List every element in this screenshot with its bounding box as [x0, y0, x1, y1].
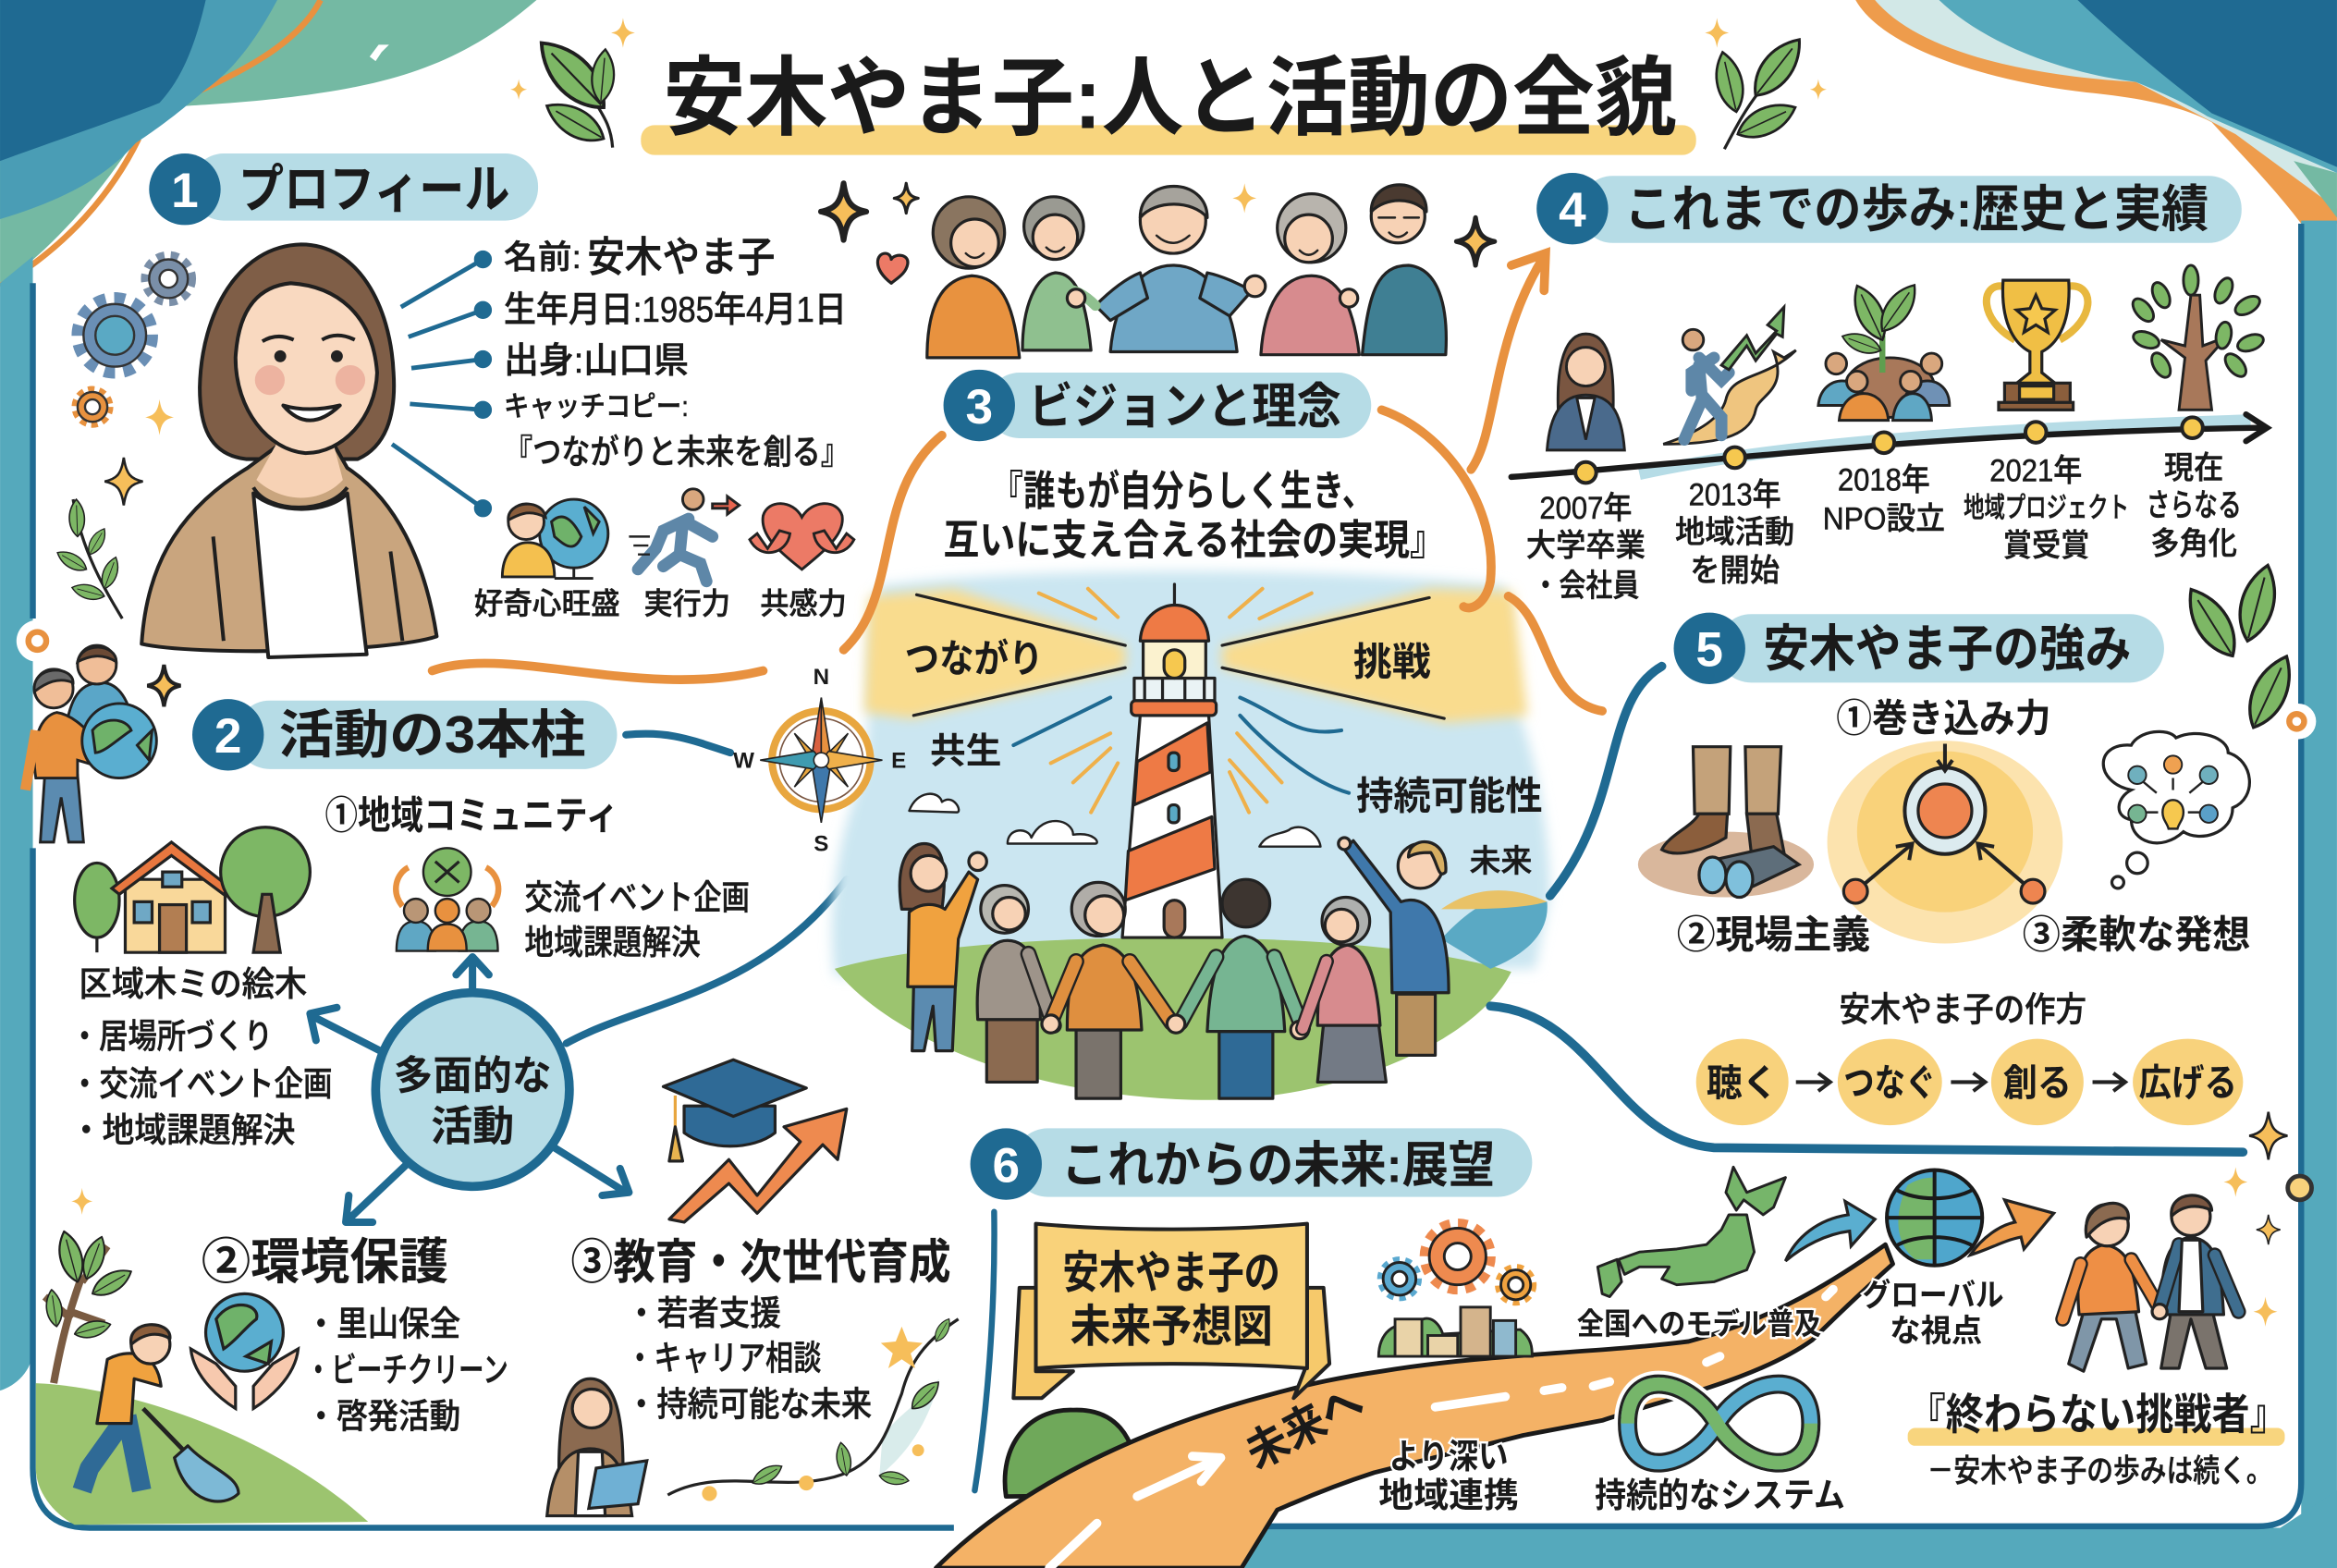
panel: activities	[25, 645, 959, 1516]
timeline labels: 2007年	[1539, 491, 1632, 526]
hub: multifaceted activities: 多面的な	[394, 1054, 552, 1098]
list: place making	[70, 1016, 333, 1149]
process: listen connect create expand	[1696, 1039, 2243, 1125]
icon: earth in hands	[190, 1293, 298, 1408]
portrait	[141, 244, 436, 657]
heading: future: 6	[992, 1138, 1020, 1193]
caption: house: 区域木ミの絵木	[80, 964, 307, 1003]
hub arrows	[310, 734, 847, 1222]
icon: globe	[1887, 1170, 1982, 1266]
icon: community	[396, 848, 498, 951]
vision statement: 『誰もが自分らしく生き、	[991, 468, 1374, 515]
title: 安木やま子:人と活動の全貌	[663, 50, 1677, 147]
sub-heading: environment: ②環境保護	[202, 1235, 448, 1290]
sub-heading: education: ③教育・次世代育成	[571, 1235, 951, 1289]
timeline labels: さらなる	[2147, 488, 2242, 523]
timeline labels	[1526, 451, 2242, 604]
list: place making: ・交流イベント企画	[70, 1064, 333, 1103]
panel: profile	[54, 153, 854, 657]
divider line	[974, 1212, 995, 1490]
illustration: environment cleanup	[44, 1188, 239, 1501]
banner: future forecast	[1013, 1224, 1329, 1398]
icon: title leaves left	[510, 18, 635, 150]
heading: future: これからの未来:展望	[1061, 1138, 1495, 1193]
beam keywords	[905, 637, 1543, 879]
icon: gears and city	[1378, 1225, 1532, 1356]
timeline labels: ・会社員	[1532, 569, 1639, 604]
icon: curious child with globe	[502, 499, 608, 579]
list: education: ・キャリア相談	[626, 1339, 821, 1378]
icon: orange arrow	[1970, 1200, 2054, 1255]
panel: vision	[433, 253, 2243, 1152]
list: place making: ・地域課題解決	[70, 1110, 295, 1149]
future labels: な視点	[1890, 1314, 1982, 1349]
sub-heading: community: ①地域コミュニティ	[325, 793, 618, 837]
hub: multifaceted activities: 活動	[431, 1102, 514, 1149]
timeline labels: 地域活動	[1675, 515, 1794, 550]
background: top-left curtain	[0, 0, 536, 287]
future labels: より深い	[1389, 1437, 1509, 1476]
closing message: 『終わらない挑戦者』	[1908, 1390, 2288, 1439]
heading: vision: ビジョンと理念	[1028, 380, 1341, 435]
icon: climber	[1663, 307, 1796, 444]
panel: future	[936, 1128, 2288, 1568]
profile facts: 名前:	[504, 239, 581, 276]
list: environment	[306, 1305, 508, 1435]
heading: profile: プロフィール	[239, 160, 509, 218]
timeline labels: 現在	[2164, 451, 2223, 486]
timeline labels: 大学卒業	[1526, 528, 1646, 563]
beam keywords: つながり	[905, 637, 1044, 680]
method heading: 安木やま子の作方	[1839, 989, 2086, 1028]
icon: infinity	[1628, 1384, 1811, 1463]
list: environment: ・ビーチクリーン	[306, 1350, 508, 1389]
icon: compass: N	[814, 665, 829, 690]
timeline labels: NPO設立	[1823, 501, 1945, 536]
illustration: couple walking	[2062, 1195, 2239, 1371]
future labels: 全国へのモデル普及	[1577, 1307, 1821, 1341]
list: environment: ・里山保全	[306, 1305, 460, 1343]
list: community	[525, 877, 750, 962]
future labels: 持続的なシステム	[1595, 1476, 1845, 1514]
profile facts: 生年月日:1985年4月1日	[504, 290, 847, 330]
icon: gears	[76, 256, 190, 506]
profile facts: キャッチコピー:	[504, 391, 689, 423]
icon: graduation cap and rising arrow	[663, 1060, 847, 1222]
timeline labels: を開始	[1690, 554, 1780, 589]
process: listen connect create expand: 創る	[2003, 1062, 2072, 1104]
trait labels: 好奇心旺盛	[474, 587, 620, 620]
beam keywords: 挑戦	[1353, 640, 1431, 683]
icon: sparkle	[2249, 1112, 2287, 1159]
list: education: ・持続可能な未来	[626, 1385, 872, 1424]
timeline labels: 地域プロジェクト	[1964, 492, 2129, 523]
strengths labels: ③柔軟な発想	[2023, 913, 2250, 956]
timeline labels: 2018年	[1838, 462, 1930, 497]
icon: seedling with people	[1818, 278, 1950, 421]
icon: compass: S	[814, 832, 828, 857]
icon: compass	[733, 665, 906, 857]
beam keywords: 持続可能性	[1356, 774, 1543, 817]
list: environment: ・啓発活動	[306, 1396, 460, 1435]
timeline labels: 賞受賞	[2003, 528, 2089, 563]
process: listen connect create expand: 広げる	[2139, 1062, 2237, 1104]
icon: leaf sprig	[54, 499, 122, 619]
icon: student with tablet	[547, 1378, 647, 1516]
timeline	[1511, 414, 2267, 483]
icon: vine with star	[667, 1317, 959, 1501]
icon: compass: E	[891, 748, 906, 773]
icon: compass: W	[733, 748, 754, 773]
people holding hands	[899, 838, 1449, 1098]
future labels: グローバル	[1862, 1278, 2004, 1313]
icon: boots and binoculars	[1638, 747, 1814, 898]
heading: activities: 2	[214, 709, 242, 764]
future road	[936, 1244, 1893, 1568]
icon: leaves	[2178, 561, 2301, 734]
banner: future forecast: 安木やま子の	[1063, 1248, 1280, 1298]
illustration: community group	[821, 183, 1495, 358]
vision statement: 互いに支え合える社会の実現』	[944, 517, 1446, 564]
strengths labels: ②現場主義	[1677, 913, 1870, 956]
list: community: 地域課題解決	[525, 923, 701, 962]
trait labels: 共感力	[760, 587, 847, 620]
timeline labels: 2021年	[1989, 454, 2082, 489]
heading: activities: 活動の3本柱	[279, 705, 586, 764]
icon: blue arrow	[1785, 1201, 1875, 1261]
icon: map of Japan	[1597, 1167, 1785, 1297]
icon: sparkles	[2223, 1167, 2281, 1327]
process: listen connect create expand: つなぐ	[1843, 1062, 1936, 1104]
hub: multifaceted activities	[375, 993, 569, 1186]
panel: history	[1511, 173, 2267, 604]
heading: profile: 1	[171, 164, 199, 218]
heading: activities	[192, 699, 617, 770]
mind map links	[433, 253, 2243, 1152]
list: place making: ・居場所づくり	[70, 1016, 273, 1055]
diagram: strengths core	[1828, 741, 2062, 944]
profile facts: 出身:山口県	[504, 341, 689, 381]
heading: strengths: 安木やま子の強み	[1763, 620, 2131, 678]
process: listen connect create expand: 聴く	[1707, 1062, 1778, 1104]
vision statement	[944, 468, 1446, 564]
icon: graduate	[1547, 334, 1624, 450]
road label: 未来へ	[1238, 1376, 1372, 1478]
heading: vision: 3	[965, 380, 993, 435]
panel: strengths	[1638, 561, 2301, 1159]
heading: history	[1536, 173, 2242, 244]
profile facts	[504, 233, 850, 471]
icon: people holding globe	[25, 645, 180, 842]
list: community: 交流イベント企画	[525, 877, 750, 916]
heading: vision	[944, 370, 1371, 441]
beam keywords: 未来	[1470, 844, 1532, 879]
banner: future forecast: 未来予想図	[1071, 1302, 1273, 1352]
heading: profile	[149, 153, 538, 225]
icon: idea thought cloud	[2103, 731, 2249, 888]
icon: house and trees	[75, 827, 310, 952]
icon: trophy	[1987, 280, 2087, 410]
beam keywords: 共生	[930, 731, 1001, 771]
profile facts: 『つながりと未来を創る』	[504, 432, 850, 471]
background: top-right curtain	[1855, 0, 2337, 224]
heading: history: 4	[1559, 183, 1586, 238]
heading: history: これまでの歩み:歴史と実績	[1624, 180, 2209, 238]
heading: future	[971, 1128, 1532, 1200]
closing message	[1908, 1390, 2288, 1488]
icon: title leaves right	[1705, 18, 1827, 149]
timeline labels: 多角化	[2150, 527, 2237, 562]
list: education: ・若者支援	[626, 1293, 781, 1332]
heading: strengths: 5	[1695, 623, 1723, 678]
illustration: lighthouse scene	[832, 571, 1550, 1100]
future labels	[1378, 1278, 2004, 1514]
connector lines	[392, 252, 490, 515]
lighthouse	[1122, 584, 1222, 937]
trait labels	[474, 587, 847, 620]
icon: runner	[629, 489, 740, 582]
list: education	[626, 1293, 872, 1424]
timeline labels: 2013年	[1689, 478, 1781, 513]
heading: strengths	[1674, 613, 2164, 684]
future labels: 地域連携	[1378, 1476, 1519, 1514]
trait labels: 実行力	[644, 587, 730, 620]
profile facts: 安木やま子	[587, 233, 775, 280]
strengths labels	[1677, 913, 2250, 956]
closing message: －安木やま子の歩みは続く。	[1927, 1453, 2273, 1488]
strengths label: involve: ①巻き込み力	[1836, 697, 2050, 741]
icon: tree	[2129, 265, 2266, 410]
icon: heart with hands	[750, 504, 854, 570]
